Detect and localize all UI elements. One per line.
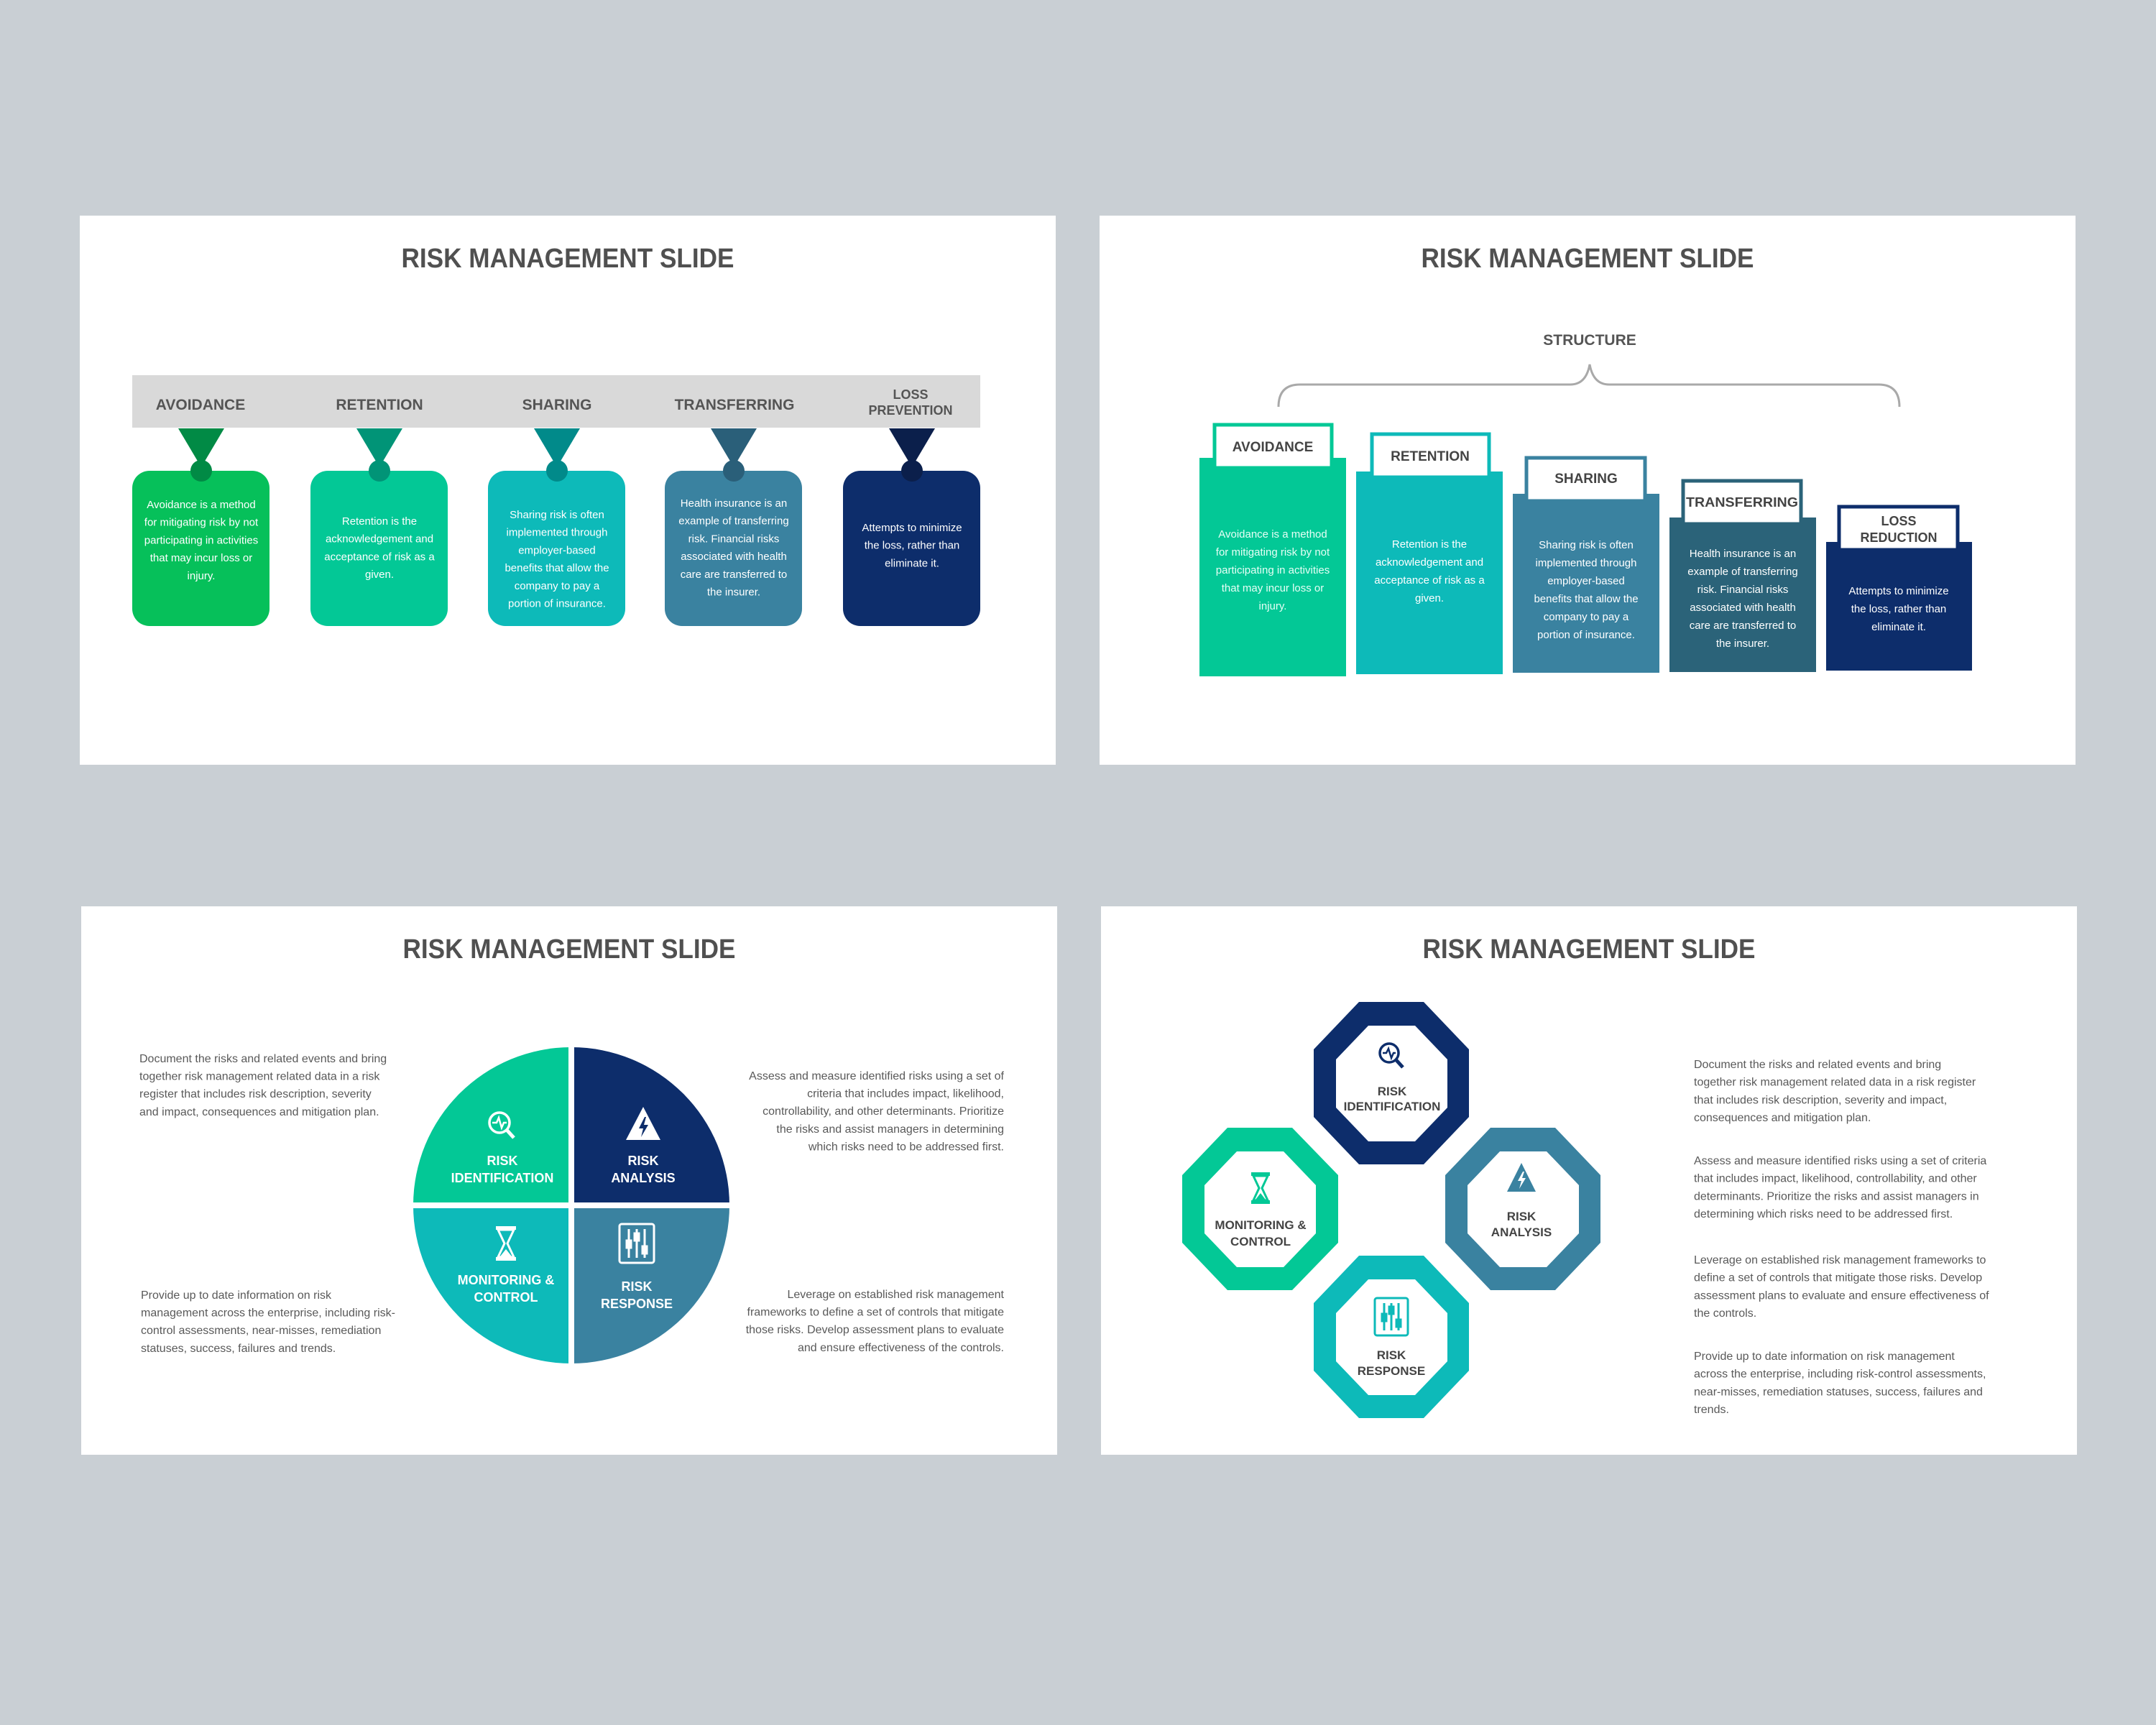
- text block: identification: Document the risks and related events and bring: [139, 1053, 387, 1065]
- card: transferring: the insurer.: [707, 586, 760, 598]
- text block: analysis: the risks and assist managers in determining: [776, 1123, 1004, 1136]
- column: avoidance: Avoidance is a method: [1218, 528, 1327, 540]
- column: loss reduction: REDUCTION: [1860, 530, 1938, 545]
- card: avoidance: Avoidance is a method: [147, 499, 256, 511]
- octagon: risk response: RESPONSE: [1358, 1364, 1425, 1378]
- card: retention: acknowledgement and: [326, 533, 433, 546]
- card: sharing: implemented through: [507, 527, 607, 539]
- text block: descriptions: define a set of controls that mitigate those risks. Develop: [1694, 1272, 1982, 1284]
- column: transferring: risk. Financial risks: [1697, 584, 1788, 596]
- text block: descriptions: [1694, 1059, 1989, 1416]
- quadrant labels: ANALYSIS: [611, 1171, 676, 1185]
- quadrant labels: RESPONSE: [601, 1297, 673, 1311]
- card: transferring: risk. Financial risks: [688, 533, 779, 545]
- text block: descriptions: consequences and mitigation plan.: [1694, 1112, 1871, 1124]
- card: transferring: Health insurance is an: [681, 497, 787, 510]
- text block: response: those risks. Develop assessment plans to evaluate: [746, 1324, 1004, 1336]
- icon: sliders: [619, 1224, 654, 1263]
- text block: response: Leverage on established risk management: [787, 1289, 1005, 1301]
- column: transferring: [1669, 481, 1816, 672]
- column: sharing: [1513, 458, 1659, 673]
- octagon: risk identification: IDENTIFICATION: [1344, 1100, 1440, 1113]
- text block: descriptions: across the enterprise, including risk-control assessments,: [1694, 1368, 1986, 1381]
- panel: slide 1 horizontal tags: [80, 216, 1056, 765]
- column: avoidance: [1199, 425, 1346, 676]
- header bar: PREVENTION: [868, 403, 953, 418]
- pie chart: [408, 1042, 734, 1369]
- text block: descriptions: Document the risks and related events and bring: [1694, 1059, 1941, 1071]
- quadrant labels: IDENTIFICATION: [451, 1171, 553, 1185]
- column: transferring: example of transferring: [1687, 566, 1798, 578]
- card: retention: given.: [365, 569, 394, 581]
- column: sharing: company to pay a: [1544, 611, 1629, 623]
- header bar: RETENTION: [336, 397, 423, 413]
- column: sharing: SHARING: [1554, 472, 1618, 487]
- column: retention: RETENTION: [1391, 449, 1470, 464]
- quadrant labels: CONTROL: [474, 1290, 538, 1305]
- title slide 1: RISK MANAGEMENT SLIDE: [401, 244, 734, 274]
- title slide 3: RISK MANAGEMENT SLIDE: [402, 934, 736, 965]
- column: transferring: care are transferred to: [1690, 620, 1796, 632]
- octagon: risk response: RISK: [1377, 1348, 1406, 1362]
- column: sharing: implemented through: [1536, 557, 1636, 569]
- text block: descriptions: determining which risks need to be addressed first.: [1694, 1208, 1953, 1220]
- text block: descriptions: the controls.: [1694, 1307, 1756, 1320]
- column: sharing: portion of insurance.: [1537, 629, 1635, 641]
- column: retention: acknowledgement and: [1376, 556, 1483, 569]
- column: sharing: employer-based: [1547, 575, 1625, 587]
- octagon: risk analysis: RISK: [1507, 1210, 1537, 1223]
- panel: slide 2 structure columns: [1100, 216, 2076, 765]
- icon: hourglass: [496, 1226, 516, 1261]
- icon: warning: [626, 1107, 660, 1140]
- card: sharing: [488, 428, 625, 626]
- octagon: risk identification: RISK: [1378, 1085, 1407, 1098]
- card: loss prevention: Attempts to minimize: [862, 522, 962, 534]
- quadrant labels: RISK: [621, 1279, 653, 1294]
- card: retention: [310, 428, 448, 626]
- octagon: risk response: [1314, 1256, 1469, 1418]
- text block: descriptions: that includes risk description, severity and impact,: [1694, 1094, 1947, 1106]
- quadrant labels: [451, 1154, 676, 1311]
- text block: identification: together risk management related data in a risk: [139, 1071, 380, 1083]
- text block: descriptions: that includes impact, likelihood, controllability, and other: [1694, 1173, 1977, 1185]
- column: sharing: Sharing risk is often: [1539, 539, 1634, 551]
- column: loss reduction: the loss, rather than: [1851, 603, 1946, 615]
- octagon: monitoring & control: CONTROL: [1230, 1235, 1291, 1248]
- text block: analysis: controllability, and other determinants. Prioritize: [763, 1105, 1004, 1118]
- card: avoidance: participating in activities: [144, 534, 258, 546]
- quadrant labels: RISK: [627, 1154, 659, 1168]
- column: avoidance: for mitigating risk by not: [1216, 546, 1330, 558]
- text block: descriptions: Leverage on established risk management frameworks to: [1694, 1254, 1986, 1266]
- card: transferring: [665, 428, 802, 626]
- column: retention: acceptance of risk as a: [1374, 574, 1485, 586]
- brace: [1279, 364, 1899, 407]
- card: avoidance: for mitigating risk by not: [144, 517, 259, 529]
- card: sharing: employer-based: [518, 544, 596, 556]
- card: sharing: portion of insurance.: [508, 598, 606, 610]
- text block: descriptions: assessment plans to evaluate and ensure effectiveness of: [1694, 1289, 1989, 1302]
- panel: slide 3 pie quadrants: [81, 906, 1057, 1455]
- header bar: [132, 375, 980, 428]
- column: retention: Retention is the: [1392, 538, 1467, 551]
- text block: monitoring: Provide up to date information on risk: [141, 1289, 332, 1302]
- quadrant labels: MONITORING &: [458, 1273, 554, 1287]
- column: loss reduction: [1826, 507, 1972, 671]
- text block: response: and ensure effectiveness of the controls.: [798, 1342, 1004, 1354]
- column: avoidance: AVOIDANCE: [1233, 440, 1313, 455]
- card: retention: Retention is the: [342, 515, 417, 528]
- octagon: monitoring & control: [1182, 1128, 1338, 1290]
- card: transferring: care are transferred to: [681, 569, 787, 581]
- column: loss reduction: Attempts to minimize: [1848, 585, 1949, 597]
- column: loss reduction: LOSS: [1881, 514, 1917, 528]
- header bar: LOSS: [893, 387, 929, 402]
- card: sharing: benefits that allow the: [505, 562, 609, 574]
- header bar: SHARING: [522, 397, 591, 413]
- column: transferring: TRANSFERRING: [1686, 495, 1798, 510]
- column: transferring: Health insurance is an: [1690, 548, 1796, 560]
- column: loss reduction: eliminate it.: [1871, 621, 1926, 633]
- octagon: risk analysis: ANALYSIS: [1491, 1225, 1552, 1239]
- octagon: risk identification: [1314, 1002, 1469, 1164]
- header bar: TRANSFERRING: [675, 397, 794, 413]
- title slide 4: RISK MANAGEMENT SLIDE: [1423, 934, 1755, 965]
- card: avoidance: [132, 428, 270, 626]
- column: avoidance: that may incur loss or: [1222, 582, 1324, 594]
- icon: magnifier: [489, 1113, 514, 1138]
- text block: descriptions: together risk management related data in a risk register: [1694, 1077, 1976, 1089]
- text block: analysis: which risks need to be addressed first.: [808, 1141, 1004, 1153]
- quadrant labels: RISK: [487, 1154, 518, 1168]
- column: sharing: benefits that allow the: [1534, 593, 1639, 605]
- octagon: risk analysis: [1445, 1128, 1600, 1290]
- card: sharing: company to pay a: [515, 580, 600, 592]
- card: loss prevention: the loss, rather than: [865, 540, 959, 552]
- text block: monitoring: statuses, success, failures and trends.: [141, 1343, 336, 1355]
- text block: analysis: criteria that includes impact, likelihood,: [807, 1088, 1004, 1100]
- text block: response: frameworks to define a set of controls that mitigate: [747, 1307, 1004, 1319]
- column: avoidance: participating in activities: [1216, 564, 1330, 576]
- card: avoidance: injury.: [188, 570, 215, 582]
- text block: descriptions: near-misses, remediation statuses, success, failures and: [1694, 1386, 1983, 1398]
- text block: identification: and impact, consequences and mitigation plan.: [139, 1106, 379, 1118]
- column: transferring: the insurer.: [1716, 638, 1769, 650]
- card: sharing: Sharing risk is often: [510, 509, 604, 521]
- column: retention: given.: [1415, 592, 1444, 604]
- octagon: monitoring & control: MONITORING &: [1215, 1218, 1307, 1232]
- text block: monitoring: management across the enterprise, including risk-: [141, 1307, 395, 1320]
- structure heading: STRUCTURE: [1543, 332, 1636, 349]
- card: avoidance: that may incur loss or: [150, 552, 252, 564]
- card: transferring: example of transferring: [678, 515, 789, 528]
- column: retention: [1356, 434, 1503, 674]
- title slide 2: RISK MANAGEMENT SLIDE: [1422, 244, 1754, 274]
- text block: descriptions: Assess and measure identified risks using a set of criteria: [1694, 1155, 1986, 1167]
- text block: monitoring: control assessments, near-misses, remediation: [141, 1325, 381, 1337]
- card: retention: acceptance of risk as a: [324, 551, 435, 563]
- panel: slide 4 octagons: [1101, 906, 2077, 1455]
- text block: identification: register that includes risk description, severity: [139, 1088, 372, 1100]
- header bar: AVOIDANCE: [156, 397, 245, 413]
- column: avoidance: injury.: [1259, 600, 1286, 612]
- text block: analysis: Assess and measure identified risks using a set of: [749, 1070, 1005, 1082]
- card: loss prevention: eliminate it.: [885, 557, 939, 569]
- text block: descriptions: Provide up to date information on risk management: [1694, 1351, 1955, 1363]
- text block: descriptions: trends.: [1694, 1404, 1729, 1416]
- card: transferring: associated with health: [681, 551, 787, 563]
- card: loss prevention: [843, 428, 980, 626]
- text block: descriptions: determinants. Prioritize the risks and assist managers in: [1694, 1190, 1979, 1202]
- column: transferring: associated with health: [1690, 602, 1796, 614]
